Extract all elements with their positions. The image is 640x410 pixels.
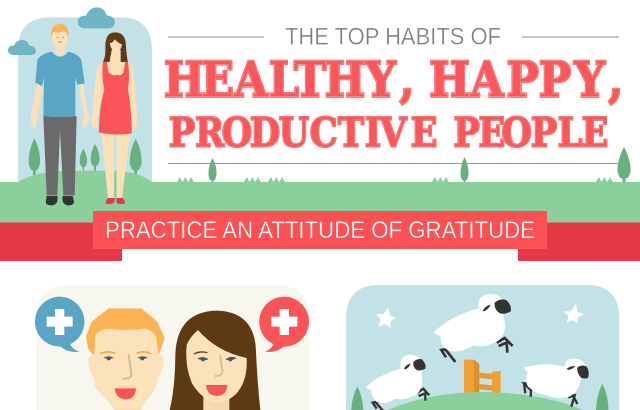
man t-shirt xyxy=(35,52,85,117)
woman eyebrow xyxy=(194,352,207,354)
title: healthy, happy,: HEALTHY,HAPPY, xyxy=(164,51,623,108)
title: productive people: PRODUCTIVEPEOPLE xyxy=(169,109,608,156)
woman neck xyxy=(203,393,229,410)
icon: star right xyxy=(563,304,584,324)
man neck and head xyxy=(55,43,65,56)
panel background xyxy=(36,285,309,410)
icon: cloud top xyxy=(78,7,115,28)
trees behind couple xyxy=(29,139,142,175)
panel: sheep jumping fence xyxy=(346,285,619,410)
ribbon banner: practice an attitude of gratitude xyxy=(0,211,640,261)
woman face shape xyxy=(186,330,247,403)
man head xyxy=(88,323,164,409)
woman face xyxy=(169,311,261,410)
illustration: couple in landscape xyxy=(8,7,153,205)
man hair xyxy=(51,24,69,37)
trees xyxy=(351,384,608,410)
woman shoes xyxy=(106,198,125,204)
sheep head xyxy=(495,299,511,314)
ground band xyxy=(0,182,640,224)
woman mouth xyxy=(206,385,227,396)
icon: star left xyxy=(376,308,396,328)
man trousers xyxy=(43,116,77,195)
icon: blue speech bubble with cross xyxy=(35,297,84,352)
woman neck and face xyxy=(109,50,121,67)
woman red dress xyxy=(99,62,132,135)
night sky background xyxy=(346,285,619,410)
title: productive people: PRODUCTIVEPEOPLE xyxy=(169,109,608,156)
woman legs xyxy=(102,133,130,199)
ribbon back left xyxy=(0,222,122,261)
man mouth xyxy=(115,388,136,399)
man neck xyxy=(114,400,141,410)
man eyebrows xyxy=(100,352,151,354)
title: healthy, happy,: HEALTHY,HAPPY, xyxy=(164,51,623,108)
grass tufts xyxy=(177,177,613,182)
woman nose xyxy=(215,355,222,376)
woman hair back xyxy=(103,32,128,63)
sheep ear xyxy=(483,305,491,311)
horizon trees xyxy=(208,147,631,182)
sheep: left xyxy=(366,355,429,410)
woman arms and shoulders xyxy=(91,62,137,131)
man face xyxy=(86,308,165,410)
heading: the top habits of: THE TOP HABITS OF xyxy=(285,24,501,50)
man nose xyxy=(123,354,131,379)
woman figure xyxy=(91,32,137,204)
sky arch panel xyxy=(18,17,152,182)
sheep legs xyxy=(441,338,513,362)
divider line xyxy=(168,163,620,164)
hill xyxy=(373,392,597,410)
man eyes xyxy=(103,356,148,359)
hill xyxy=(17,171,153,183)
ribbon back right xyxy=(518,222,640,261)
man shoes xyxy=(46,196,74,205)
man figure xyxy=(31,24,89,205)
panel: couple faces with health bubbles xyxy=(35,285,309,410)
man arms xyxy=(31,83,89,129)
woman hair back xyxy=(169,311,261,410)
title: healthy, happy,: HEALTHY,HAPPY, xyxy=(164,51,623,108)
man hair xyxy=(86,308,165,356)
woman eyes xyxy=(197,357,237,360)
banner text: PRACTICE AN ATTITUDE OF GRATITUDE xyxy=(105,217,535,244)
sheep body xyxy=(434,294,505,352)
icon: red speech bubble with cross xyxy=(259,297,309,352)
sheep: top xyxy=(434,294,513,362)
fence xyxy=(464,360,501,393)
title: productive people: PRODUCTIVEPEOPLE xyxy=(169,109,608,156)
ribbon front xyxy=(93,211,547,249)
sheep: right xyxy=(524,359,589,407)
icon: cloud left xyxy=(8,40,36,55)
